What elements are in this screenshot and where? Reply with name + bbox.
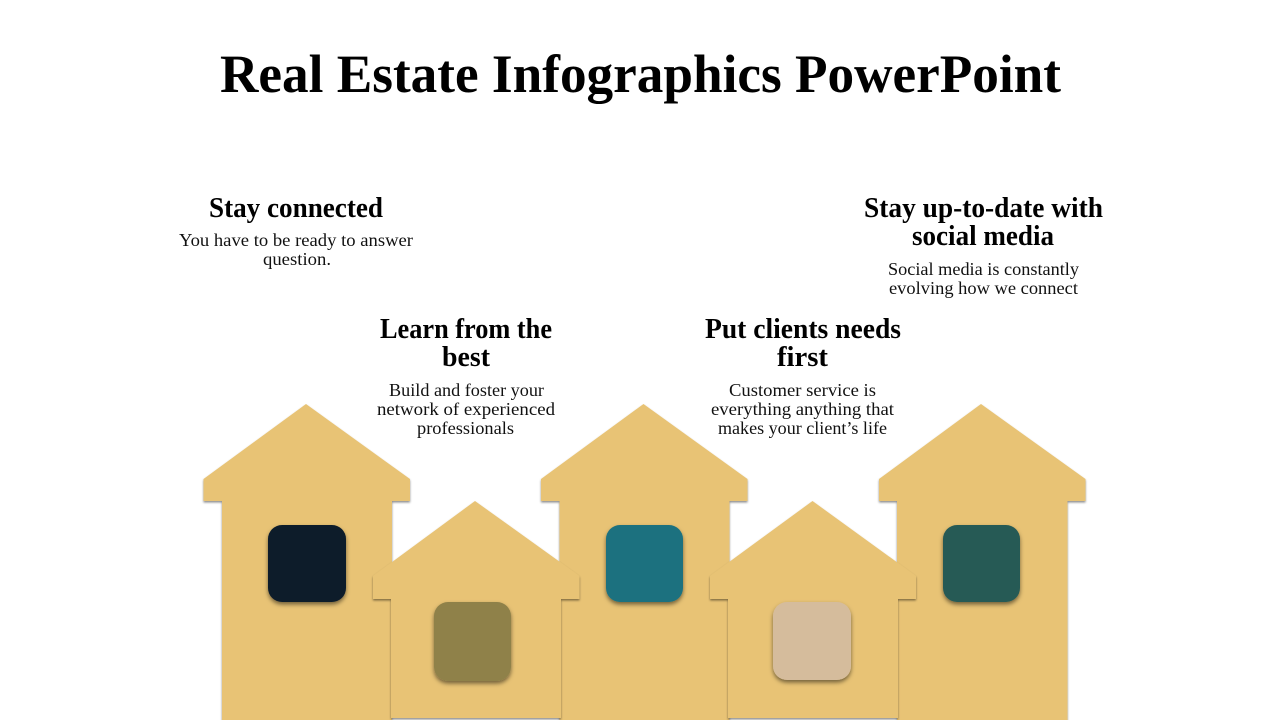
house 3 bbox=[541, 404, 748, 720]
text block: put clients needs first bbox=[705, 314, 901, 438]
icon tile: tan bbox=[773, 602, 851, 680]
text block: put clients needs first: Customer service is bbox=[729, 380, 876, 400]
text block: stay up-to-date with social media: evolving how we connect bbox=[889, 278, 1078, 298]
icon tile: dark green bbox=[943, 525, 1020, 602]
text block: stay up-to-date with social media: social media bbox=[912, 221, 1054, 252]
text block: learn from the best: network of experienced bbox=[377, 399, 555, 419]
text block: put clients needs first: first bbox=[777, 342, 829, 373]
text block: stay up-to-date with social media: Stay up-to-date with bbox=[864, 193, 1103, 224]
house 5 bbox=[879, 404, 1086, 720]
text block: stay up-to-date with social media bbox=[864, 193, 1103, 298]
text block: learn from the best: Learn from the bbox=[380, 314, 552, 345]
text block: stay up-to-date with social media: Social media is constantly bbox=[888, 259, 1079, 279]
text block: put clients needs first: makes your client’s life bbox=[718, 418, 887, 438]
icon tile: teal bbox=[606, 525, 683, 602]
text block: put clients needs first: everything anything that bbox=[711, 399, 894, 419]
house 2 bbox=[373, 501, 580, 718]
text block: learn from the best: Build and foster your bbox=[389, 380, 544, 400]
house 4 bbox=[710, 501, 916, 718]
text block: learn from the best: professionals bbox=[417, 418, 514, 438]
title: Real Estate Infographics PowerPoint bbox=[220, 44, 1061, 104]
text block: learn from the best: best bbox=[442, 342, 491, 373]
text block: stay connected: You have to be ready to answer bbox=[179, 230, 413, 250]
text block: learn from the best bbox=[377, 314, 555, 438]
text block: stay connected bbox=[179, 193, 413, 269]
icon tile: navy bbox=[268, 525, 346, 602]
text block: put clients needs first: Put clients needs bbox=[705, 314, 901, 345]
house 1 bbox=[204, 404, 410, 720]
text block: stay connected: Stay connected bbox=[209, 193, 383, 224]
icon tile: olive bbox=[434, 602, 511, 681]
text block: stay connected: question. bbox=[263, 249, 331, 269]
